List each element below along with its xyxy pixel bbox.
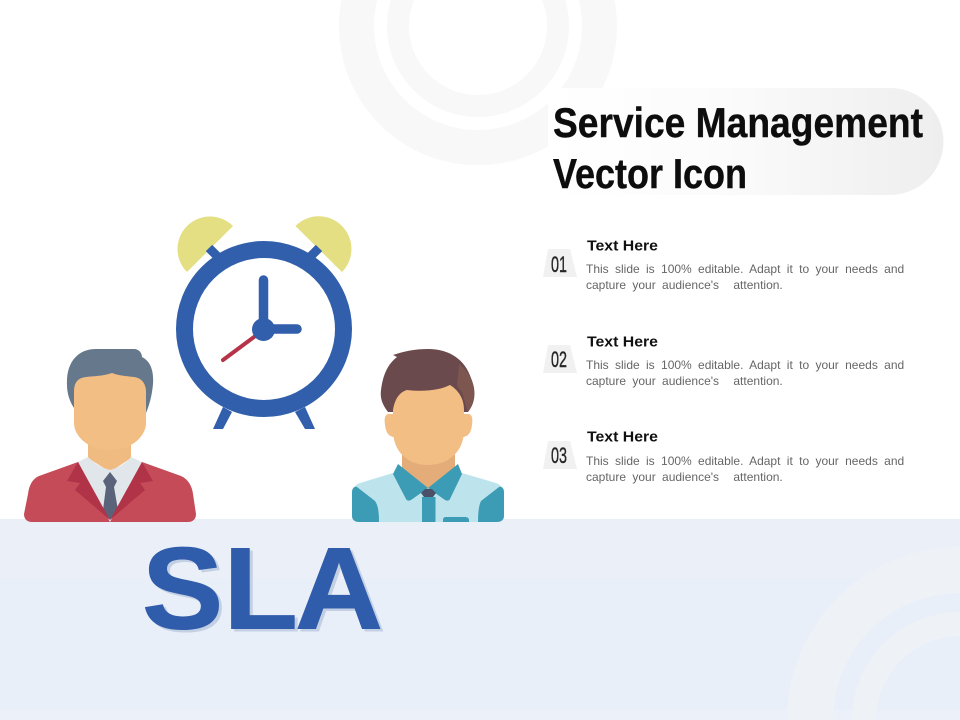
bell stems [209,248,319,260]
item body: This slide is 100% editable. Adapt it to your needs and [586,454,904,468]
icon: alarm clock [177,216,351,429]
left lapel [67,462,110,520]
person: man in blue shirt [352,349,504,522]
list item 02 [543,334,904,388]
SLA heading: SLA [145,527,386,656]
hair [67,349,153,413]
right lapel [110,462,153,520]
tie [422,497,436,522]
person: man in red suit [24,349,196,522]
tie knot [421,489,436,497]
icon: left bell [177,216,233,272]
item body: This slide is 100% editable. Adapt it to your needs and [586,358,904,372]
item heading: Text Here [587,238,658,254]
right sleeve [478,487,504,522]
hair highlight [457,364,474,412]
collar [393,464,462,501]
background rings: bottom right [787,547,960,720]
minute and hour hands [264,280,297,329]
title pill [548,88,943,195]
icon: right bell [295,216,351,272]
bottom band [0,519,960,720]
item body: capture your audience's attention. [586,470,783,484]
hair back [381,349,474,412]
item body: capture your audience's attention. [586,374,783,388]
number: 02 [551,347,567,372]
clock feet [213,407,315,429]
shirt collar [78,457,142,520]
jacket [24,462,196,522]
item body: This slide is 100% editable. Adapt it to your needs and [586,262,904,276]
tie [103,472,118,520]
background rings: top [339,0,617,165]
clock hub [252,318,275,341]
list item 03 [543,428,904,484]
left sleeve [352,487,379,522]
number badge [543,345,577,373]
number: 01 [551,252,567,277]
ears [385,414,472,437]
title: Service Management [553,99,923,146]
face [393,385,464,465]
neck [88,435,131,472]
title [553,99,923,197]
face [74,373,146,450]
number badge [543,249,577,277]
title: Vector Icon [553,150,747,197]
pocket [443,517,469,522]
SLA heading: SLA [142,524,383,654]
item heading: Text Here [587,334,658,350]
number: 03 [551,443,567,468]
number badge [543,441,577,469]
clock face [184,250,344,408]
second hand [223,334,258,360]
shirt [352,473,504,522]
list item 01 [543,238,904,292]
item heading: Text Here [587,428,658,446]
item body: capture your audience's attention. [586,278,783,292]
neck [402,450,455,490]
